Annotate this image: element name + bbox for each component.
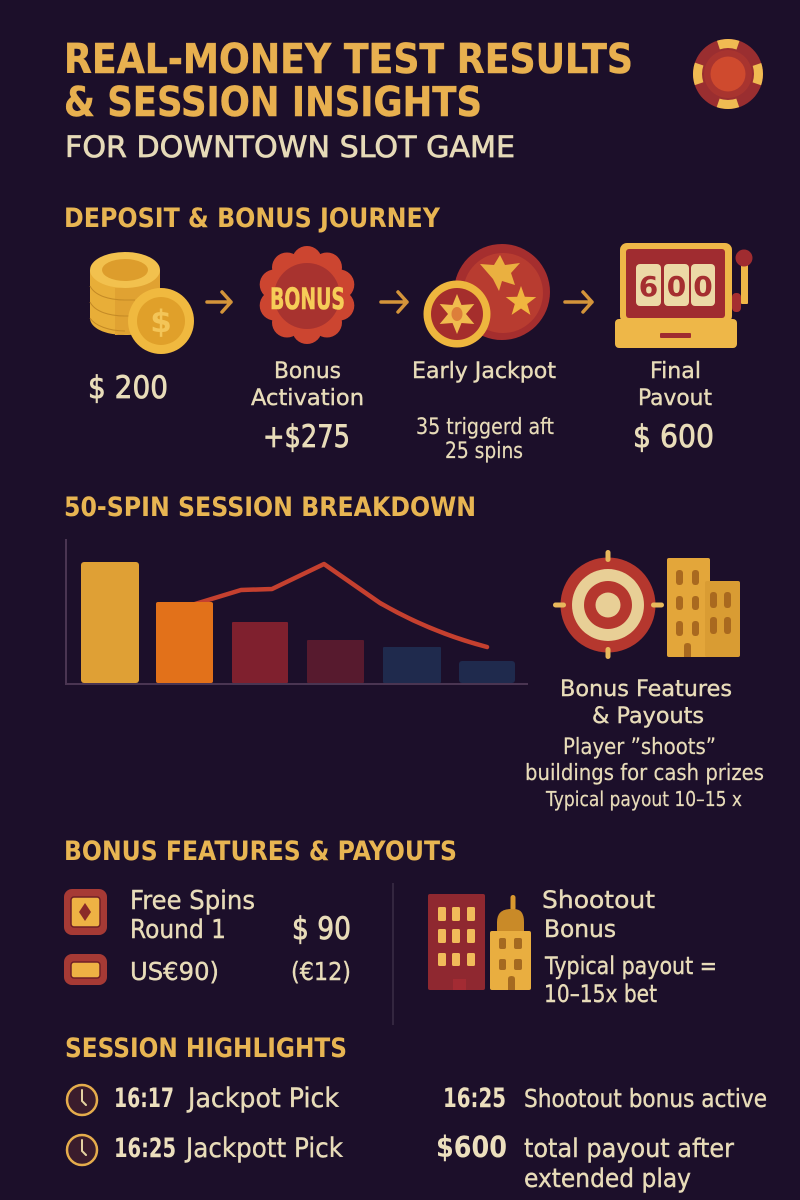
free spins label <box>130 886 255 945</box>
icon: clock two <box>67 1135 97 1165</box>
icon: casino chip <box>693 39 763 109</box>
euro line <box>130 957 351 986</box>
heading: 50-spin session breakdown: 50-SPIN SESSION BREAKDOWN <box>64 492 476 523</box>
icon: round token <box>64 954 107 985</box>
euro line: US€90) <box>130 957 219 986</box>
heading: deposit and bonus journey: DEPOSIT & BONUS JOURNEY <box>64 203 440 234</box>
icon: target <box>553 550 664 659</box>
title: & SESSION INSIGHTS <box>64 78 482 126</box>
icon: early jackpot coins <box>424 244 550 348</box>
icon: clock one <box>67 1085 97 1115</box>
early jackpot detail: 35 triggerd aft <box>416 415 554 440</box>
icon: bonus badge: BONUS <box>270 282 345 316</box>
bonus features side description: Typical payout 10–15 x <box>545 787 742 811</box>
icon: slot machine: 0 <box>667 270 686 303</box>
early jackpot detail <box>416 415 554 464</box>
icon: free spins card <box>64 889 107 935</box>
arrow: deposit to bonus <box>207 292 231 312</box>
subtitle: FOR DOWNTOWN SLOT GAME <box>65 130 515 164</box>
bonus activation label: Activation <box>251 386 364 411</box>
early jackpot detail: 25 spins <box>445 439 523 464</box>
highlight: shootout bonus active: 16:25 <box>443 1083 506 1114</box>
icon: bonus badge <box>260 246 354 344</box>
bonus features side description: Player ”shoots” <box>563 735 716 760</box>
icon: coin stack: $ <box>150 304 172 340</box>
early jackpot label: Early Jackpot <box>412 359 556 384</box>
shootout bonus payout <box>544 952 717 1008</box>
final payout amount: $ 600 <box>633 419 714 455</box>
highlight: total payout: extended play <box>524 1164 691 1194</box>
free spins label: Free Spins <box>130 886 255 916</box>
icon: slot machine: 0 <box>693 270 713 303</box>
free spins amount: $ 90 <box>292 911 351 947</box>
arrow: jackpot to payout <box>565 292 592 312</box>
chart: session bars and line <box>66 539 528 684</box>
highlight: 16:17 jackpot pick: Jackpot Pick <box>186 1083 339 1114</box>
highlight: total payout: total payout after <box>524 1134 734 1164</box>
highlight: shootout bonus active: Shootout bonus active <box>524 1084 767 1113</box>
highlight: 16:17 jackpot pick <box>114 1083 339 1114</box>
highlight: total payout: $600 <box>436 1130 507 1164</box>
deposit amount: $ 200 <box>88 370 168 406</box>
final payout label <box>638 359 712 411</box>
highlight: 16:25 jackpot pick: 16:25 <box>114 1133 176 1164</box>
highlight: total payout <box>436 1130 734 1194</box>
icon: shootout buildings <box>428 894 531 990</box>
highlight: 16:25 jackpot pick <box>114 1133 343 1164</box>
bonus features side label <box>560 677 732 729</box>
final payout label: Final <box>650 359 701 384</box>
shootout bonus label: Shootout <box>542 886 655 914</box>
bonus activation label: Bonus <box>274 359 341 384</box>
arrow: bonus to jackpot <box>381 292 407 312</box>
shootout bonus label <box>542 886 655 943</box>
heading: session highlights: SESSION HIGHLIGHTS <box>65 1033 347 1064</box>
free spins label: Round 1 <box>130 915 226 945</box>
shootout bonus payout: 10–15x bet <box>544 980 657 1008</box>
final payout label: Pavout <box>638 386 712 411</box>
bonus features side label: & Payouts <box>592 704 704 729</box>
shootout bonus label: Bonus <box>544 915 616 943</box>
icon: slot machine <box>615 243 752 348</box>
highlight: 16:25 jackpot pick: Jackpott Pick <box>184 1133 343 1164</box>
bonus features side description: buildings for cash prizes <box>525 761 764 786</box>
title: REAL-MONEY TEST RESULTS <box>64 35 633 83</box>
icon: coin stack <box>90 252 194 354</box>
bonus features side label: Bonus Features <box>560 677 732 702</box>
icon: gold buildings <box>667 558 740 657</box>
highlight: shootout bonus active <box>443 1083 767 1114</box>
icon: slot machine: 6 <box>639 270 658 303</box>
highlight: 16:17 jackpot pick: 16:17 <box>114 1083 174 1114</box>
heading: bonus features and payouts: BONUS FEATURES & PAYOUTS <box>64 836 457 867</box>
euro line: (€12) <box>291 957 351 986</box>
shootout bonus payout: Typical payout = <box>544 952 717 980</box>
title <box>64 35 633 126</box>
bonus amount: +$275 <box>263 419 350 455</box>
bonus activation label <box>251 359 364 411</box>
bonus features side description <box>525 735 764 811</box>
